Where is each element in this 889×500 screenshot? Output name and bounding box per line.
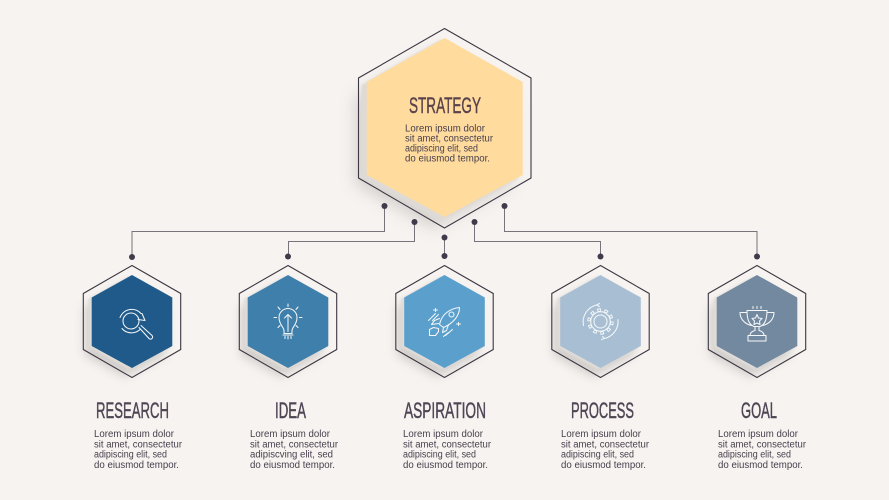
panel: strategy hexagon bbox=[356, 28, 531, 228]
text block: process description: adipiscing elit, sed bbox=[561, 450, 634, 460]
heading: process: PROCESS bbox=[571, 398, 634, 423]
text block: aspiration description: Lorem ipsum dolor bbox=[403, 429, 484, 440]
text block: research description: Lorem ipsum dolor bbox=[94, 429, 175, 440]
panel: research hexagon bbox=[83, 266, 181, 378]
icon: gear with arrows bbox=[583, 304, 618, 340]
connector: strategy to process bbox=[472, 219, 604, 260]
text block: idea description: do eiusmod tempor. bbox=[250, 460, 335, 471]
panel: process hexagon bbox=[552, 266, 649, 378]
icon: trophy bbox=[740, 306, 774, 341]
text block: strategy description: do eiusmod tempor. bbox=[405, 154, 490, 164]
text block: research description bbox=[94, 429, 183, 471]
panel: goal hexagon bbox=[708, 266, 806, 378]
icon: magnifier bbox=[120, 309, 153, 339]
heading: aspiration: ASPIRATION bbox=[404, 398, 486, 423]
text block: research description: adipiscing elit, sed bbox=[94, 450, 167, 460]
connector: strategy to aspiration bbox=[442, 234, 448, 259]
text block: aspiration description bbox=[403, 429, 492, 471]
text block: goal description: Lorem ipsum dolor bbox=[718, 429, 799, 440]
text block: idea description: adipiscving elit, sed bbox=[250, 450, 333, 460]
text block: aspiration description: sit amet, consectetur bbox=[403, 440, 492, 450]
text block: strategy description bbox=[405, 124, 494, 164]
text block: goal description bbox=[718, 429, 807, 471]
heading: goal: GOAL bbox=[741, 398, 777, 423]
text block: research description: do eiusmod tempor. bbox=[94, 460, 179, 471]
text block: process description bbox=[561, 429, 650, 471]
text block: strategy description: Lorem ipsum dolor bbox=[405, 124, 486, 134]
heading: strategy: STRATEGY bbox=[409, 93, 481, 118]
panel: idea hexagon bbox=[239, 266, 337, 378]
icon: rocket bbox=[428, 308, 460, 336]
text block: idea description: Lorem ipsum dolor bbox=[250, 429, 331, 440]
text block: idea description bbox=[250, 429, 339, 471]
connector: strategy to goal bbox=[502, 203, 760, 260]
heading: idea: IDEA bbox=[275, 398, 306, 423]
text block: process description: Lorem ipsum dolor bbox=[561, 429, 642, 440]
connector: strategy to idea bbox=[285, 219, 418, 260]
connector: strategy to research bbox=[129, 203, 388, 260]
text block: goal description: adipiscing elit, sed bbox=[718, 450, 791, 460]
text block: research description: sit amet, consectetur bbox=[94, 440, 183, 450]
text block: strategy description: sit amet, consectetur bbox=[405, 134, 494, 144]
heading: research: RESEARCH bbox=[96, 398, 169, 423]
text block: idea description: sit amet, consectetur bbox=[250, 440, 339, 450]
text block: strategy description: adipiscing elit, sed bbox=[405, 144, 478, 154]
text block: goal description: do eiusmod tempor. bbox=[718, 460, 803, 471]
text block: aspiration description: do eiusmod tempor. bbox=[403, 460, 488, 471]
panel: aspiration hexagon bbox=[396, 266, 493, 378]
icon: light bulb bbox=[274, 304, 302, 339]
text block: process description: sit amet, consectetur bbox=[561, 440, 650, 450]
text block: process description: do eiusmod tempor. bbox=[561, 460, 646, 471]
text block: goal description: sit amet, consectetur bbox=[718, 440, 807, 450]
text block: aspiration description: adipiscing elit, sed bbox=[403, 450, 476, 460]
